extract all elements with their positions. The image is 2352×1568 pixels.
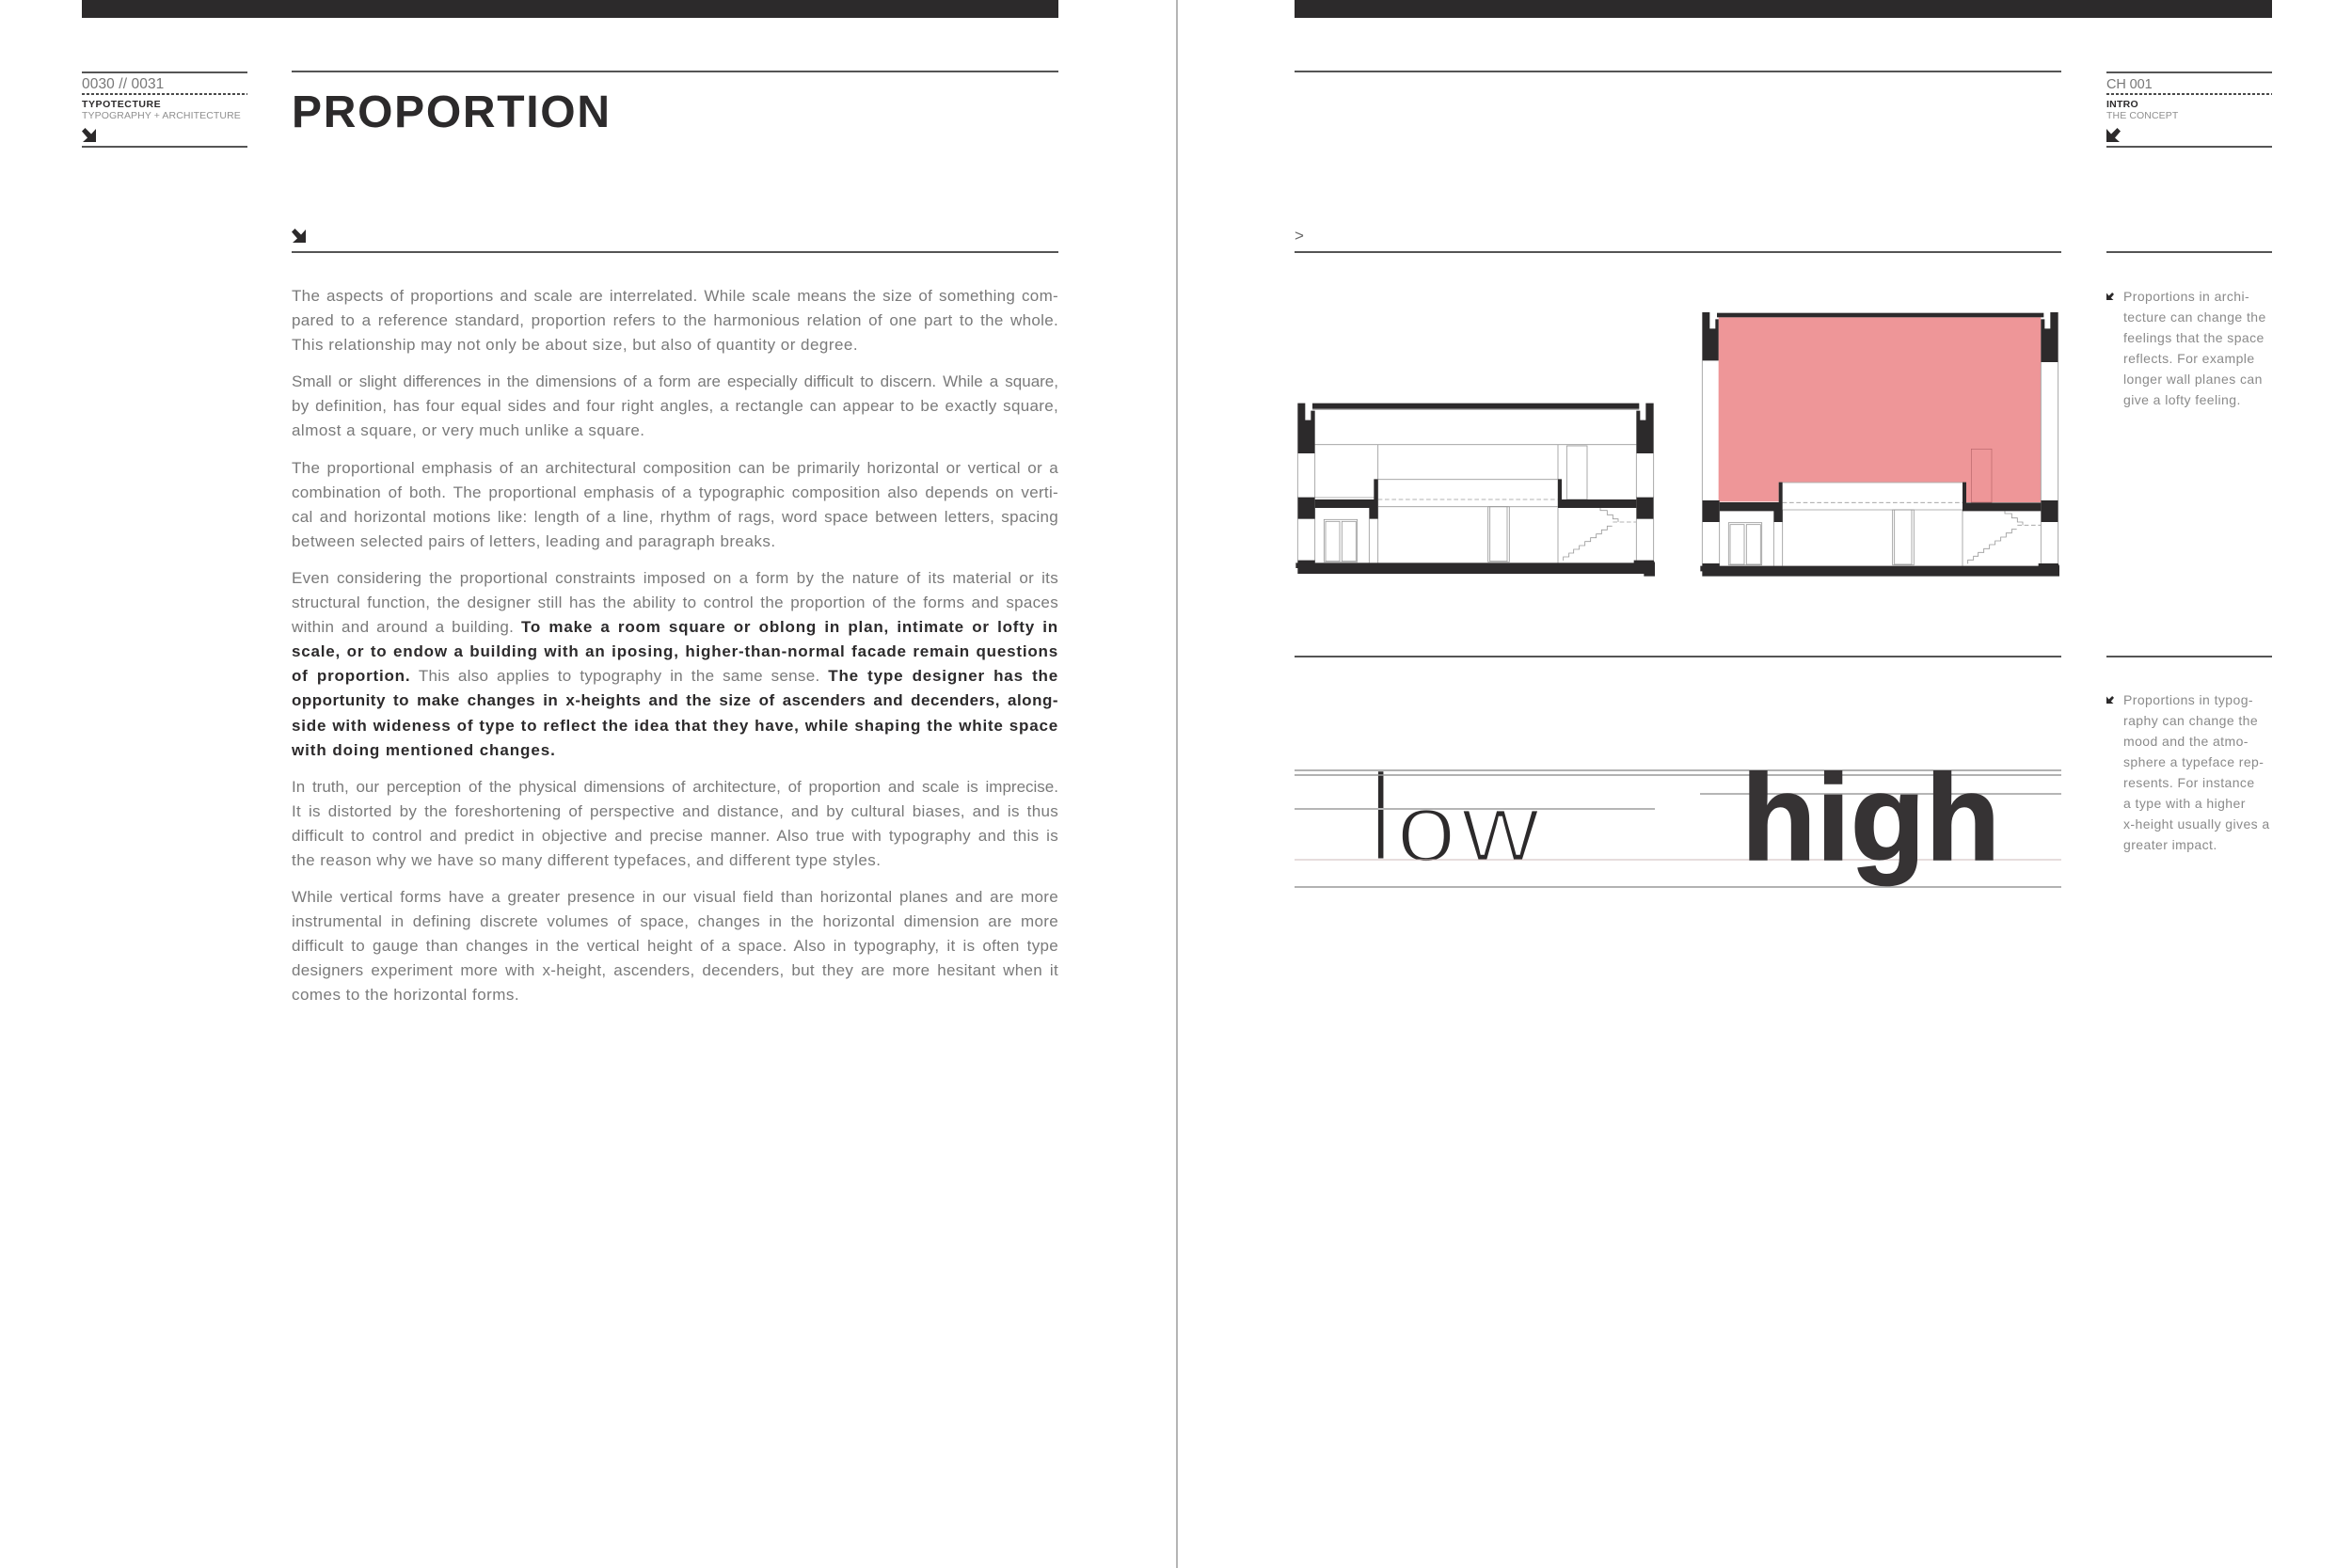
word: low: w	[1460, 773, 1540, 883]
top bar right	[1295, 0, 2272, 18]
paragraph 4 with bold emphasis: side with wideness of type to reflect the idea that they have, while shaping the white space	[292, 717, 1058, 734]
paragraph 2	[292, 372, 1058, 439]
paragraph 1	[292, 287, 1058, 354]
paragraph 4 with bold emphasis: with doing mentioned changes.	[292, 741, 556, 759]
note text: a type with a higher	[2123, 796, 2246, 811]
top bar left	[82, 0, 1058, 18]
paragraph 3: combination of both. The proportional emphasis of a typographic composition also depends on verti-	[292, 483, 1058, 501]
icon: small arrow	[2106, 293, 2114, 300]
paragraph 6: designers experiment more with x-height, ascenders, decenders, but they are more hesitant when it	[292, 961, 1058, 979]
paragraph 4 with bold emphasis: structural function, the designer still has the ability to control the proportion of the forms and spaces	[292, 594, 1058, 611]
word: low: o	[1396, 773, 1456, 883]
note text: greater impact.	[2123, 837, 2217, 852]
paragraph 4 with bold emphasis: Even considering the proportional constraints imposed on a form by the nature of its material or its	[292, 569, 1058, 587]
paragraph 1: pared to a reference standard, proportion refers to the harmonious relation of one part to the whole.	[292, 311, 1058, 329]
book subtitle: TYPOGRAPHY + ARCHITECTURE	[82, 110, 241, 121]
chapter subtitle: THE CONCEPT	[2106, 110, 2178, 121]
note text	[2123, 692, 2270, 852]
section marker: >	[1295, 227, 1304, 245]
paragraph 3: between selected pairs of letters, leading and paragraph breaks.	[292, 532, 776, 550]
note text: give a lofty feeling.	[2123, 392, 2241, 407]
type comparison low and high x-height	[1295, 745, 2061, 889]
paragraph 2: by definition, has four equal sides and four right angles, a rectangle can appear to be exactly square,	[292, 397, 1058, 415]
highlighted volume	[1719, 317, 2041, 502]
icon: arrow down left	[2106, 128, 2121, 142]
icon: small arrow	[2106, 696, 2114, 704]
note text: x-height usually gives a	[2123, 816, 2270, 832]
page numbers: 0030 // 0031	[82, 76, 164, 92]
right page header block	[2106, 71, 2272, 148]
paragraph 3	[292, 459, 1058, 550]
note text: Proportions in archi-	[2123, 289, 2249, 304]
paragraph 2: almost a square, or very much unlike a square.	[292, 421, 644, 439]
note text	[2123, 289, 2266, 407]
icon: arrow down right	[82, 128, 96, 142]
paragraph 5: It is distorted by the foreshortening of perspective and distance, and by cultural biases, and is thus	[292, 802, 1058, 820]
note text: longer wall planes can	[2123, 372, 2263, 387]
paragraph 6: difficult to gauge than changes in the vertical height of a space. Also in typography, it is often type	[292, 937, 1058, 955]
section: lofty ceiling with highlighted volume	[1700, 312, 2059, 577]
paragraph 6: While vertical forms have a greater presence in our visual field than horizontal planes and are more	[292, 888, 1058, 906]
icon: section arrow down right	[292, 229, 306, 243]
paragraph 6: instrumental in defining discrete volumes of space, changes in the horizontal dimension are more	[292, 912, 1058, 930]
word: high: high	[1741, 749, 2000, 886]
note text: resents. For instance	[2123, 775, 2255, 790]
paragraph 5: difficult to control and predict in objective and precise manner. Also true with typography and this is	[292, 827, 1058, 845]
book title: TYPOTECTURE	[82, 99, 161, 110]
paragraph 1: This relationship may not only be about size, but also of quantity or degree.	[292, 336, 858, 354]
note text: raphy can change the	[2123, 713, 2258, 728]
paragraph 3: cal and horizontal motions like: length of a line, rhythm of rags, word space between letters, spacing	[292, 508, 1058, 526]
paragraph 6: comes to the horizontal forms.	[292, 986, 519, 1004]
paragraph 5	[292, 778, 1058, 869]
body text	[292, 287, 1058, 1004]
note text: mood and the atmo-	[2123, 734, 2249, 749]
left page	[82, 0, 1058, 1004]
note text: feelings that the space	[2123, 330, 2265, 345]
page divider	[1176, 0, 1178, 1568]
paragraph 3: The proportional emphasis of an architectural composition can be primarily horizontal or vertical or a	[292, 459, 1058, 477]
note text: Proportions in typog-	[2123, 692, 2253, 707]
left page header block	[82, 71, 247, 148]
section: low ceiling	[1295, 404, 1655, 577]
paragraph 5: the reason why we have so many different typefaces, and different type styles.	[292, 851, 881, 869]
paragraph 6	[292, 888, 1058, 1004]
sidebar note: typography	[2106, 692, 2270, 852]
right page	[1295, 0, 2272, 657]
paragraph 5: In truth, our perception of the physical dimensions of architecture, of proportion and scale is imprecise.	[292, 778, 1058, 796]
title: PROPORTION	[292, 87, 612, 137]
sidebar note: architecture	[2106, 289, 2266, 407]
paragraph 4 with bold emphasis: scale, or to endow a building with an iposing, higher-than-normal facade remain questions	[292, 642, 1058, 660]
note text: sphere a typeface rep-	[2123, 754, 2264, 769]
note text: tecture can change the	[2123, 309, 2266, 325]
chapter title: INTRO	[2106, 99, 2138, 110]
paragraph 4 with bold emphasis: opportunity to make changes in x-heights and the size of ascenders and decenders, along-	[292, 691, 1058, 709]
paragraph 4 with bold emphasis: of proportion. This also applies to typography in the same sense. The type designer has the	[292, 667, 1058, 685]
architectural sections	[1295, 312, 2059, 577]
word: low: l	[1365, 745, 1396, 889]
note text: reflects. For example	[2123, 351, 2255, 366]
paragraph 4 with bold emphasis: within and around a building. To make a room square or oblong in plan, intimate or lofty in	[292, 618, 1058, 636]
paragraph 1: The aspects of proportions and scale are interrelated. While scale means the size of something com-	[292, 287, 1058, 305]
paragraph 2: Small or slight differences in the dimensions of a form are especially difficult to discern. While a square,	[292, 372, 1058, 390]
chapter number: CH 001	[2106, 77, 2153, 92]
paragraph 4 with bold emphasis	[292, 569, 1058, 759]
